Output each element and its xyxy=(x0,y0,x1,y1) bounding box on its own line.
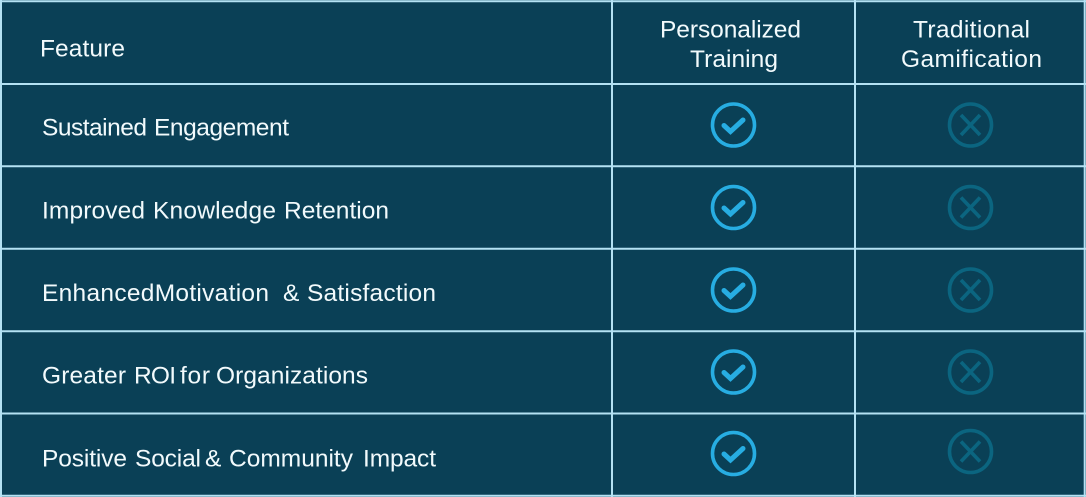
row label: Greater ROI for Organizations: Greater xyxy=(42,362,126,390)
row label: Greater ROI for Organizations: Organizations xyxy=(216,362,368,390)
row label: Positive Social and Community Impact: Impact xyxy=(363,446,436,472)
row label: Sustained Engagement: Engagement xyxy=(154,114,289,142)
icon: check row 4 xyxy=(712,351,754,393)
row label: Sustained Engagement: Sustained xyxy=(42,114,147,142)
row label: Positive Social and Community Impact: Social xyxy=(135,446,201,472)
icon: check row 2 xyxy=(712,186,754,228)
header: Personalized Training xyxy=(660,16,801,73)
header: Traditional Gamification xyxy=(901,16,1042,73)
row label: Improved Knowledge Retention xyxy=(42,198,389,224)
row label: Positive Social and Community Impact: & xyxy=(205,446,221,472)
row label: Enhanced Motivation and Satisfaction: EnhancedMotivation xyxy=(42,280,269,307)
icon: check row 1 xyxy=(712,104,754,146)
row label: Improved Knowledge Retention: Improved xyxy=(42,198,145,224)
header: Personalized Training: Training xyxy=(690,46,778,73)
icon: cross row 3 xyxy=(950,269,992,311)
row label: Enhanced Motivation and Satisfaction: & xyxy=(283,280,299,307)
row label: Greater ROI for Organizations: for xyxy=(180,362,210,390)
icon: check row 3 xyxy=(712,269,754,311)
header: Feature: Feature xyxy=(40,36,125,62)
icon: cross row 5 xyxy=(950,430,992,472)
row label: Positive Social and Community Impact: Community xyxy=(229,446,354,472)
icon: cross row 2 xyxy=(950,186,992,228)
row label: Greater ROI for Organizations xyxy=(42,362,368,390)
header: Traditional Gamification: Traditional xyxy=(913,16,1030,44)
row label: Sustained Engagement xyxy=(42,114,289,142)
row label: Enhanced Motivation and Satisfaction xyxy=(42,280,436,307)
icon: cross row 4 xyxy=(950,351,992,393)
icon: check row 5 xyxy=(712,432,754,474)
row label: Positive Social and Community Impact: Positive xyxy=(42,446,127,472)
header: Personalized Training: Personalized xyxy=(660,16,801,44)
row label: Positive Social and Community Impact xyxy=(42,446,436,472)
icon: cross row 1 xyxy=(950,104,992,146)
row label: Greater ROI for Organizations: ROI xyxy=(134,362,176,390)
header: Traditional Gamification: Gamification xyxy=(901,46,1042,73)
row label: Improved Knowledge Retention: Knowledge xyxy=(153,198,276,224)
row label: Improved Knowledge Retention: Retention xyxy=(284,198,389,224)
row label: Enhanced Motivation and Satisfaction: Satisfaction xyxy=(307,280,436,307)
